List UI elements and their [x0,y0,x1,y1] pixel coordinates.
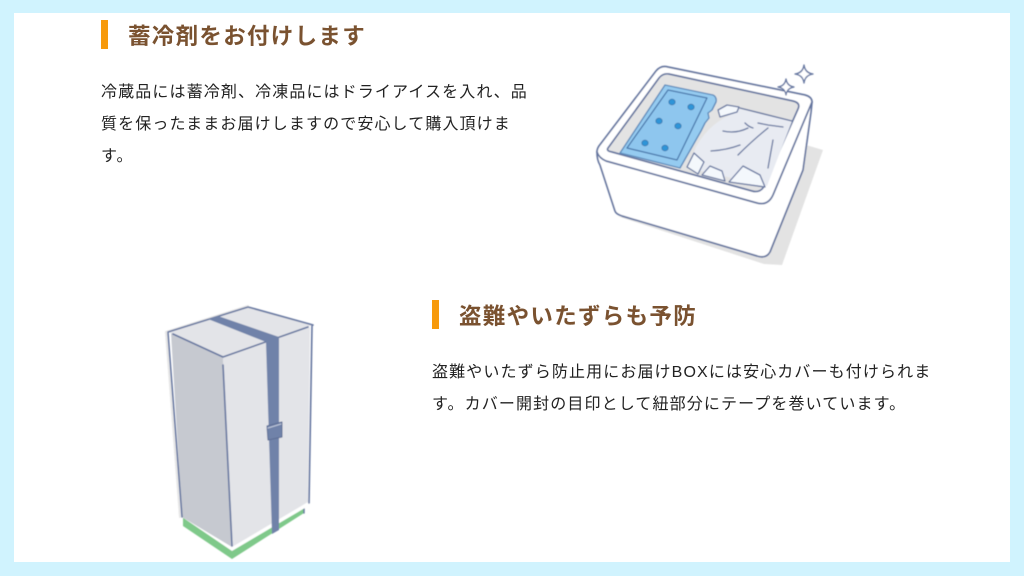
text block: theft prevention [432,363,931,413]
heading bar: theft prevention [432,300,439,329]
heading: cold packs: 蓄冷剤をお付けします [128,24,366,49]
text block: theft prevention: 盗難やいたずら防止用にお届けBOXには安心カバーも付けられま [432,364,931,381]
text block: cold packs: 冷蔵品には蓄冷剤、冷凍品にはドライアイスを入れ、品 [101,84,528,101]
heading bar: cold packs [101,20,108,49]
text block: cold packs: す。 [101,148,134,165]
text block: cold packs: 質を保ったままお届けしますので安心して購入頂けま [101,116,511,133]
text block: theft prevention: す。カバー開封の目印として紐部分にテープを巻いています。 [432,396,906,413]
text block: cold packs [101,83,528,165]
icon: foam cooler box with cold pack [597,65,823,265]
heading: theft prevention: 盗難やいたずらも予防 [459,304,697,329]
icon: tall delivery box with security strap [166,306,313,559]
